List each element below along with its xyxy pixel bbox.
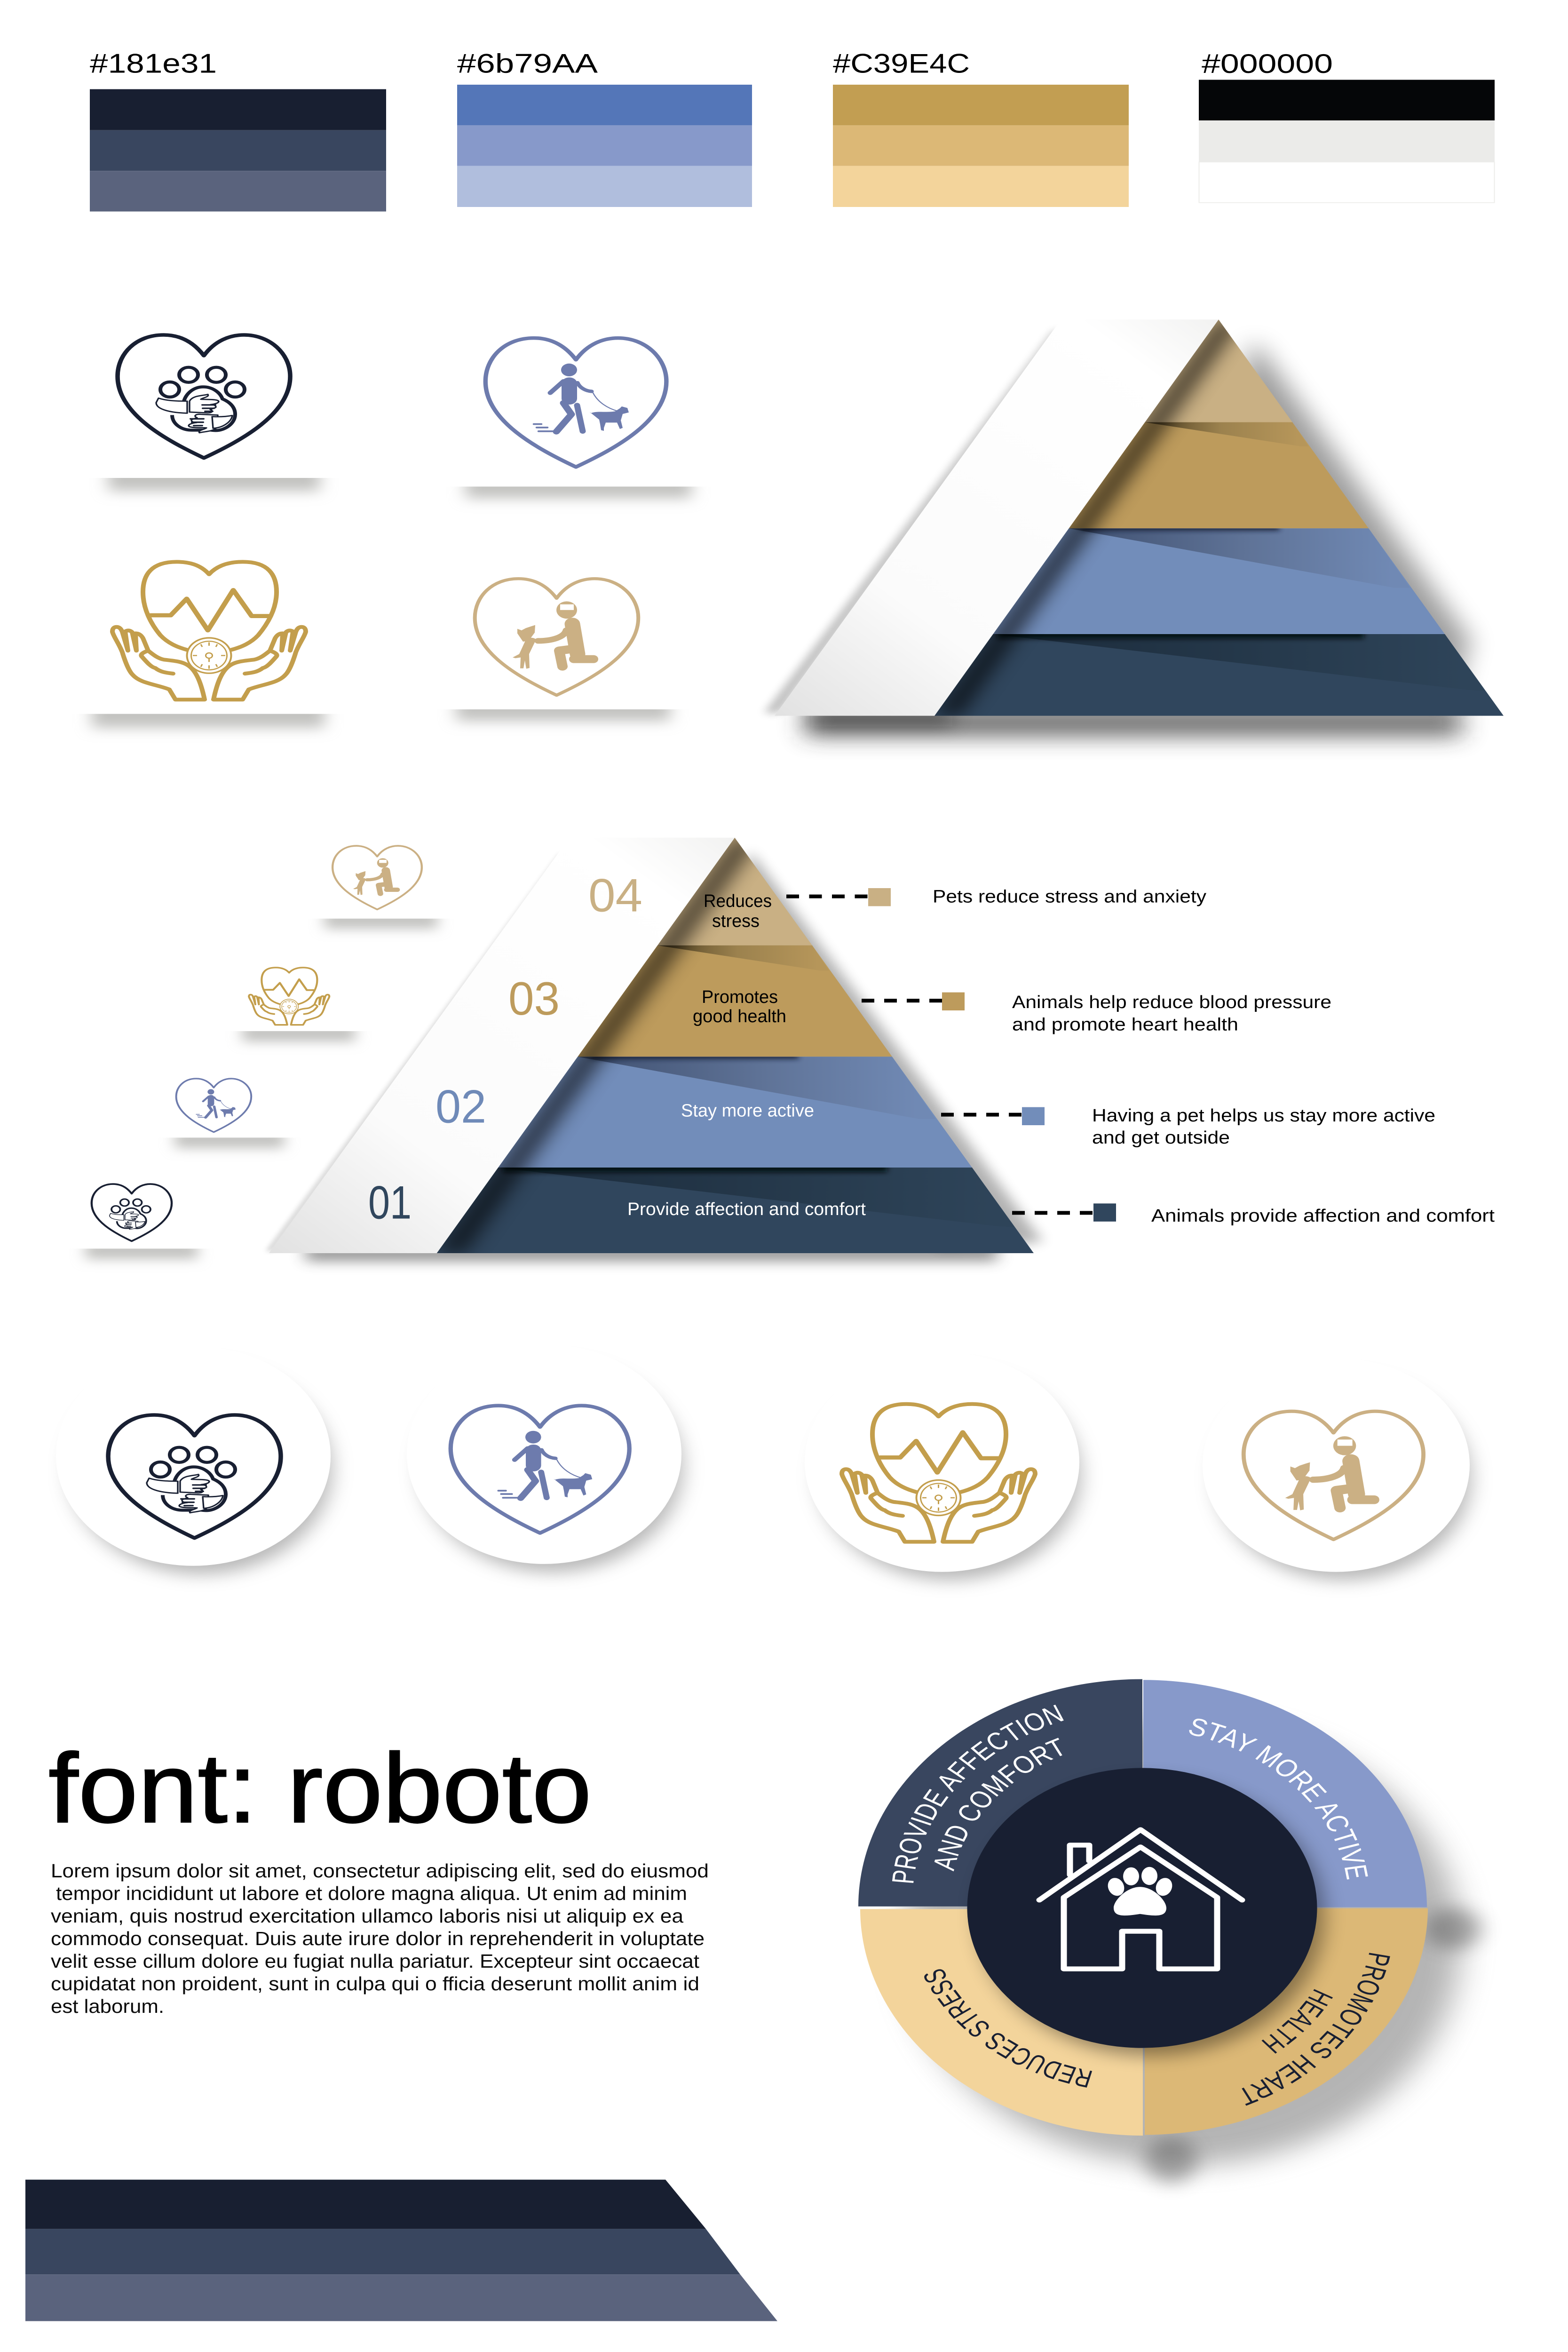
card: vet and dog icon [419,579,705,721]
ring labels: PROMOTES HEART [1233,1950,1397,2111]
text block: lorem ipsum [51,1860,709,2017]
callout: stress [786,887,1207,906]
step numbers: 03 [508,972,560,1025]
small card: hands icon [216,968,376,1041]
segment: heart [1145,1908,1428,2135]
swatch column: navy: #181e31 [90,48,217,79]
ring labels: AND COMFORT [926,1733,1071,1873]
callout: comfort [1012,1203,1495,1226]
pyramid layer labels: Stay more active [681,1101,814,1120]
panel: icon cards on shadow strips [56,335,729,728]
panel: labelled pyramid [61,838,1495,1261]
pyramid body [269,838,1034,1253]
text block: lorem ipsum: Lorem ipsum dolor sit amet, consectetur adipiscing elit, sed do eiusmod [51,1860,709,1882]
pyramid shadow [266,850,1043,1261]
callout: stress: Pets reduce stress and anxiety [933,887,1207,906]
text block: lorem ipsum: velit esse cillum dolore eu fugiat nulla pariatur. Excepteur sint occaecat [51,1950,699,1972]
panel: round icon badges [56,1344,1471,1580]
swatch column: blue [457,48,752,207]
pyramid layer labels: stress [712,911,760,931]
icon: house with paw [1039,1830,1242,1969]
callout: active: Having a pet helps us stay more active [1092,1105,1435,1126]
badge: walking [407,1344,682,1572]
callout: health [862,993,1331,1034]
step numbers [368,869,642,1229]
swatch column: black [1199,48,1495,203]
pyramid layer labels: Promotes [702,987,778,1007]
text block: lorem ipsum: commodo consequat. Duis aute irure dolor in reprehenderit in voluptate [51,1928,705,1949]
callout: health: Animals help reduce blood pressure [1012,993,1331,1012]
step numbers: 01 [368,1176,412,1229]
swatch column: black: #000000 [1202,48,1333,79]
ring labels: PROVIDE AFFECTION [885,1699,1069,1885]
centre circle shadow [978,1779,1324,2056]
callout: active [941,1105,1435,1148]
swatch column: gold: #C39E4C [833,48,970,79]
pyramid body with folded white band [775,319,1504,716]
pyramid layer labels [627,891,866,1219]
card: heart health icon [56,562,357,728]
pyramid outer shadows [764,331,1470,737]
panel: circular diagram [858,1679,1481,2184]
segment: stress [860,1909,1143,2136]
text block: lorem ipsum: cupidatat non proident, sunt in culpa qui o fficia deserunt mollit anim id [51,1973,699,1994]
callout: active: and get outside [1092,1128,1230,1148]
ring labels: REDUCES STRESS [916,1965,1096,2093]
segment: active [1143,1680,1427,1907]
text block: lorem ipsum: tempor incididunt ut labore et dolore magna aliqua. Ut enim ad minim [56,1883,687,1904]
badge: vet and dog [1203,1358,1471,1580]
segment: affection [858,1679,1142,1907]
step numbers: 02 [436,1080,486,1133]
footer banner: navy stripes [25,2180,777,2321]
small card: walk icon [150,1079,306,1148]
pyramid layer labels: good health [693,1006,786,1026]
heading: font name: font: roboto [48,1733,592,1843]
pyramid layer labels: Reduces [704,891,772,911]
diagram drop shadow [905,1721,1481,2184]
ring labels [885,1699,1397,2111]
panel: blank pyramid [764,319,1504,737]
step numbers: 04 [588,869,642,922]
card: walking icon [428,338,729,498]
card: affection icon [71,335,362,491]
panel: colour palette [90,48,1495,212]
callout: comfort: Animals provide affection and comfort [1151,1206,1495,1226]
small card: paw icon [61,1184,219,1259]
callout: health: and promote heart health [1012,1015,1238,1034]
ring labels: STAY MORE ACTIVE [1185,1712,1375,1881]
small card: vet icon [301,846,461,929]
badge: heart health [805,1352,1080,1580]
swatch column: navy [90,48,386,212]
text block: lorem ipsum: veniam, quis nostrud exercitation ullamco laboris nisi ut aliquip ex ea [51,1905,683,1927]
centre circle [967,1768,1317,2048]
small icon cards [61,846,461,1259]
ring labels: HEALTH [1256,1985,1339,2058]
badge: affection [56,1346,332,1574]
swatch column: gold [833,48,1129,207]
swatch column: blue: #6b79AA [457,48,598,79]
pyramid layer labels: Provide affection and comfort [627,1200,866,1219]
text block: lorem ipsum: est laborum. [51,1995,164,2017]
